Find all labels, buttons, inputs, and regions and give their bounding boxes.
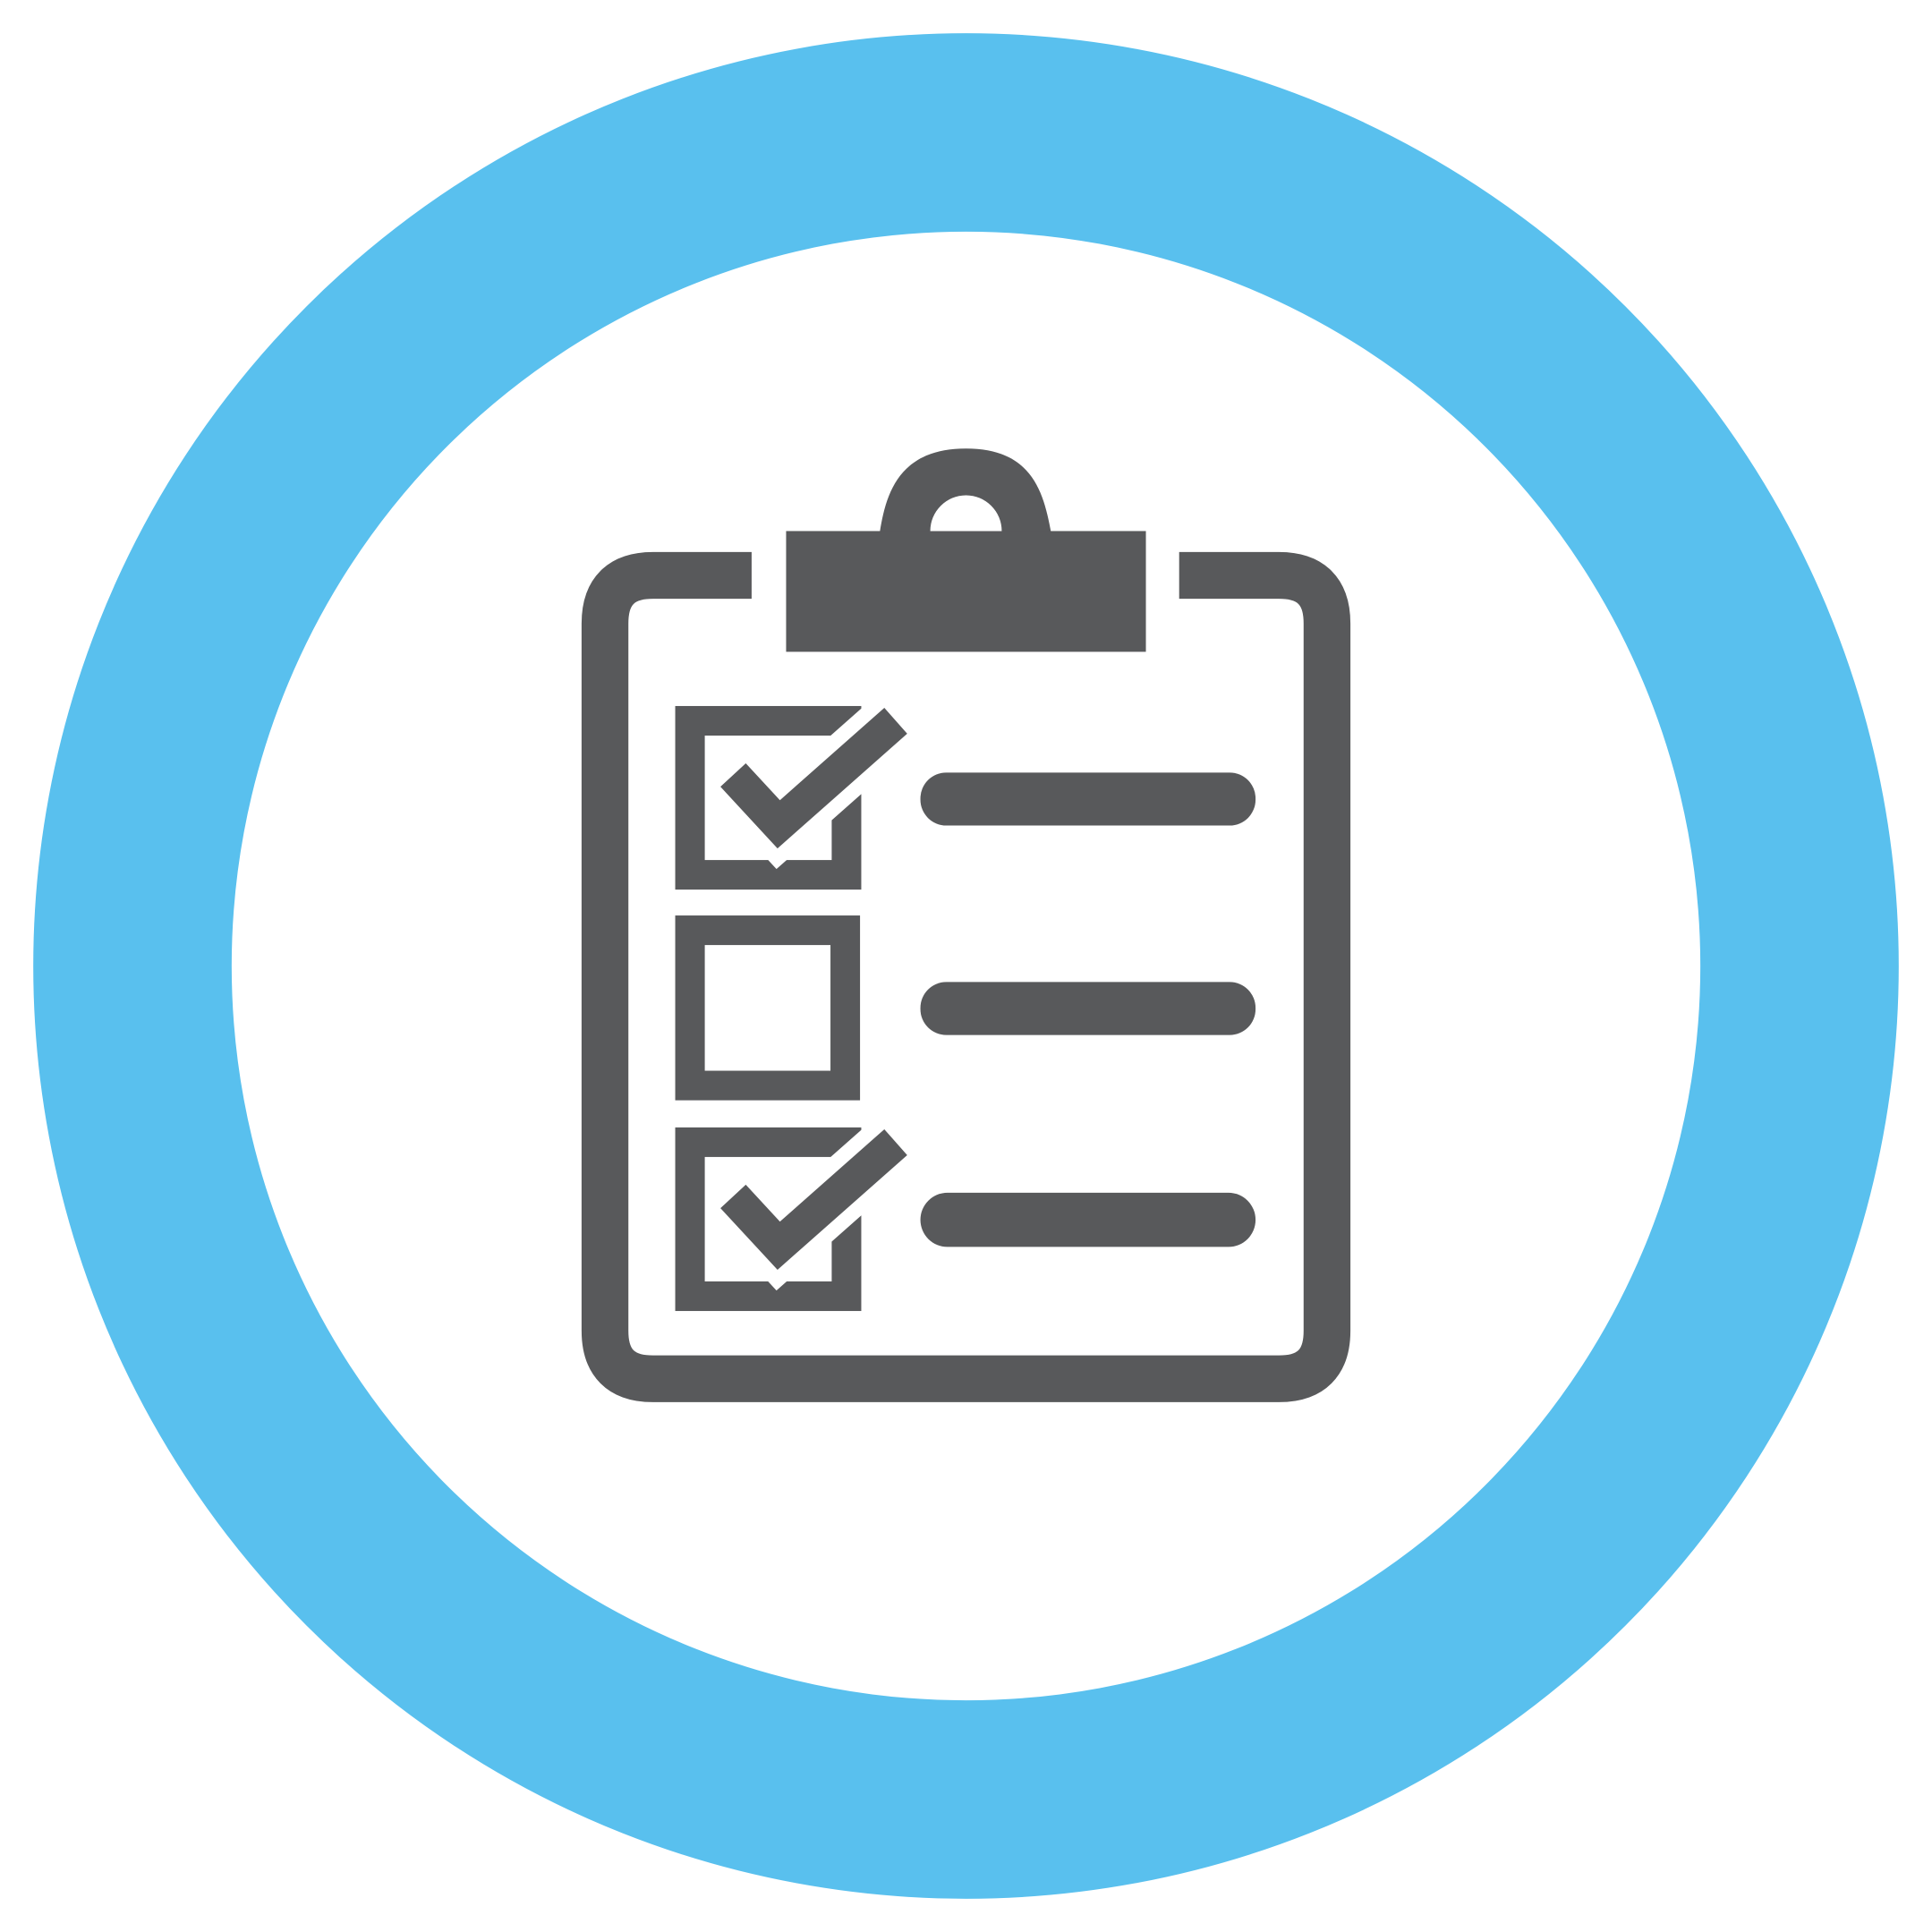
clipboard board outline (605, 575, 1327, 1379)
checklist item 2 (unchecked) (690, 931, 1255, 1085)
checklist item 3 (checked) (690, 1142, 1255, 1297)
clipboard clip (786, 448, 1146, 651)
icon: clipboard (605, 448, 1327, 1379)
checklist item 1 (checked) (690, 720, 1255, 875)
ring: blue circle (132, 132, 1800, 1800)
